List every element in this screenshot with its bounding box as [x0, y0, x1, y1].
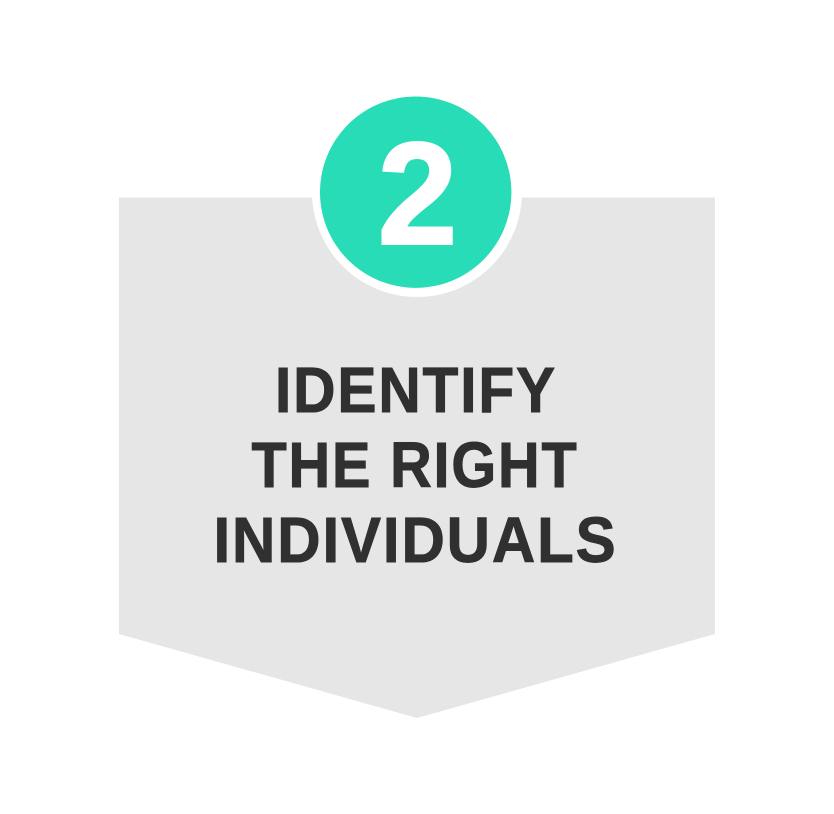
heading: identify the right individuals: IDENTIFY	[275, 354, 557, 426]
number badge	[312, 87, 522, 297]
panel: grey pentagon banner	[119, 198, 715, 718]
number badge: 2	[378, 112, 458, 275]
heading: identify the right individuals: THE RIGHT	[252, 429, 578, 501]
heading: identify the right individuals	[214, 354, 618, 576]
heading: identify the right individuals: INDIVIDUALS	[214, 504, 618, 576]
